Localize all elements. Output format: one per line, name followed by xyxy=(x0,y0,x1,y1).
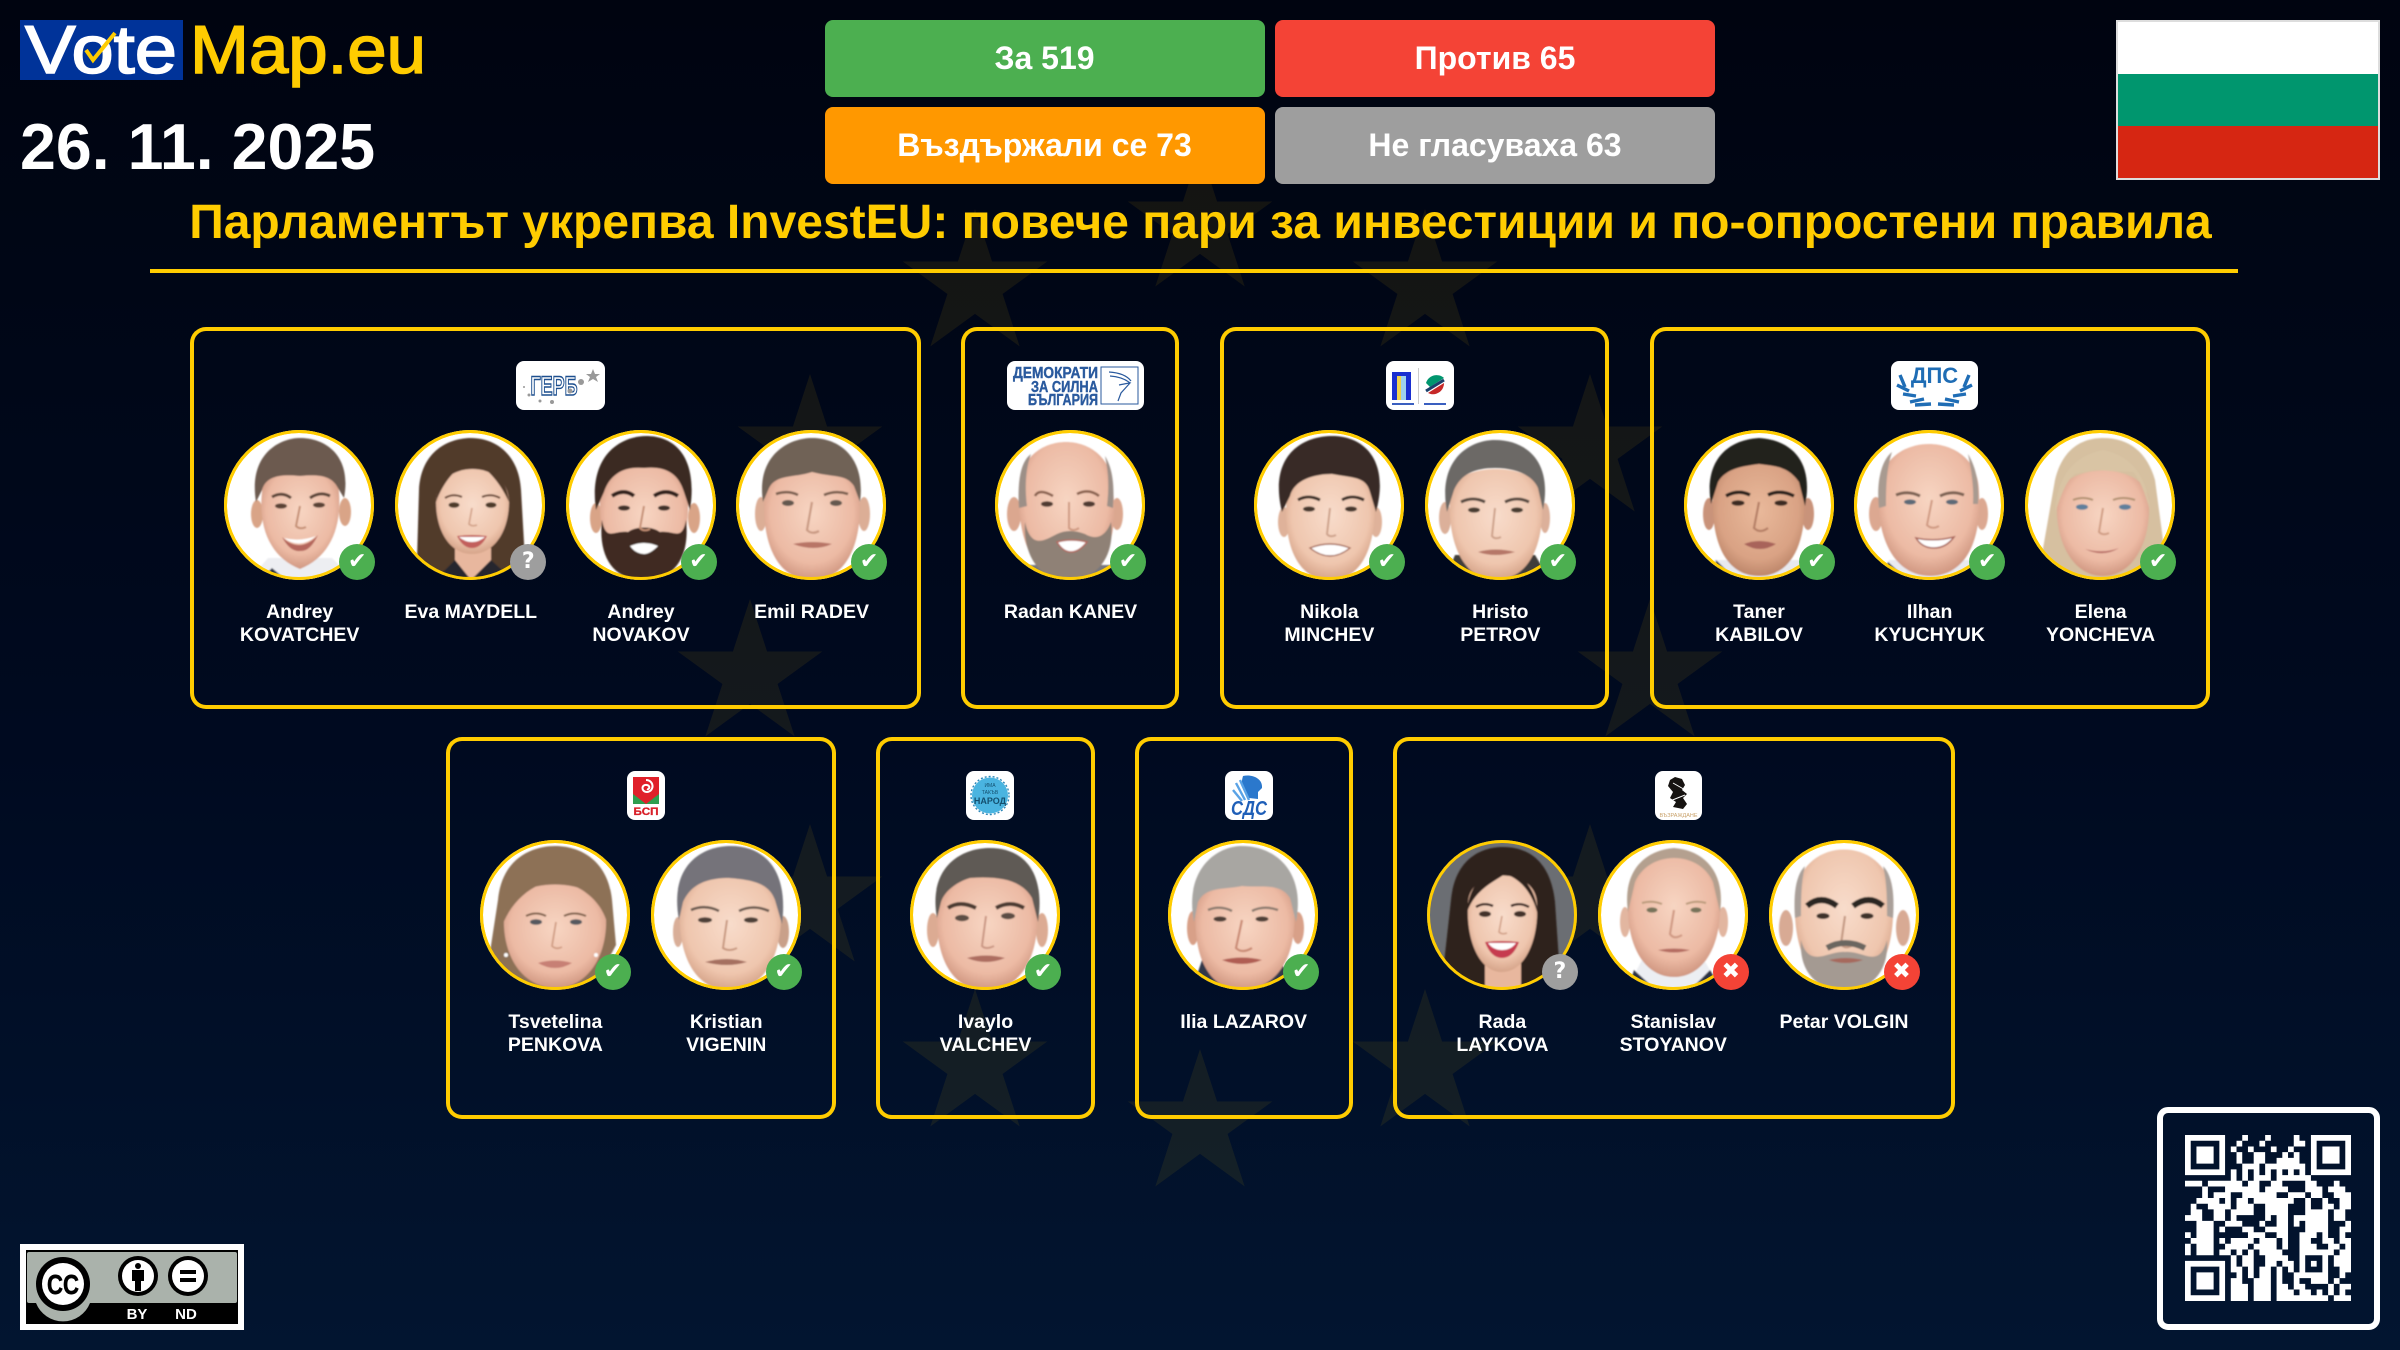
name: YONCHEVA xyxy=(2046,624,2155,646)
vote badge: no: ✖ xyxy=(1722,959,1740,984)
member: Elena Yoncheva xyxy=(2025,430,2176,646)
photo: Andrey Novakov xyxy=(566,430,716,580)
party logo: ITN: НАРОД xyxy=(974,796,1007,806)
panel: Demokrati za silna Bulgaria xyxy=(961,327,1179,709)
name: Eva MAYDELL xyxy=(404,601,537,623)
photo: Petar Volgin xyxy=(1768,840,1918,990)
party logo: DPS xyxy=(1891,361,1978,410)
name: Nikola xyxy=(1300,601,1359,623)
vote badge: yes xyxy=(2140,544,2176,580)
name: Andrey xyxy=(266,601,333,623)
name: LAYKOVA xyxy=(1456,1034,1548,1056)
name: Ivaylo xyxy=(958,1011,1013,1033)
panel: GERB xyxy=(190,327,921,709)
party logo: GERB xyxy=(516,361,605,410)
name: Emil RADEV xyxy=(754,601,869,623)
vote badge: yes xyxy=(1110,544,1146,580)
party logo: DSB xyxy=(1007,361,1144,410)
name xyxy=(1456,1011,1548,1056)
name xyxy=(1620,1011,1727,1056)
vote badge: not voted xyxy=(1542,954,1578,990)
name: Rada xyxy=(1479,1011,1526,1033)
name: Tsvetelina xyxy=(508,1011,602,1033)
vote summary: did not vote: Не гласуваха 63 xyxy=(1368,127,1622,163)
panel: BSP xyxy=(446,737,836,1119)
vote badge: yes: ✔ xyxy=(860,549,878,574)
licence badge: CC BY-ND: BY xyxy=(127,1306,147,1323)
party logo: ITN xyxy=(966,771,1014,820)
photo: Hristo Petrov xyxy=(1425,430,1575,580)
name xyxy=(592,601,690,646)
photo: Stanislav Stoyanov xyxy=(1598,840,1748,990)
party logo: ITN: ТАКЪВ xyxy=(982,790,999,796)
party logo: Vazrazhdane xyxy=(1655,771,1702,820)
photo: Rada Laykova xyxy=(1427,840,1577,990)
vote badge: yes: ✔ xyxy=(1378,549,1396,574)
member: Eva Maydell xyxy=(395,430,546,623)
vote badge: yes xyxy=(766,954,802,990)
vote badge: yes xyxy=(680,544,716,580)
vote summary: for xyxy=(824,20,1264,97)
party logo: SDS xyxy=(1225,771,1273,820)
vote badge: no xyxy=(1884,954,1920,990)
vote badge: yes: ✔ xyxy=(1034,959,1052,984)
name: KYUCHYUK xyxy=(1874,624,1985,646)
party logo: PP-DB xyxy=(1386,361,1454,410)
name: PETROV xyxy=(1460,624,1540,646)
name xyxy=(240,601,360,646)
vote badge: yes: ✔ xyxy=(1292,959,1310,984)
vote badge: yes xyxy=(1540,544,1576,580)
vote badge: yes xyxy=(339,544,375,580)
vote summary: abstained: Въздържали се 73 xyxy=(897,127,1192,163)
licence badge: CC BY-ND: CC xyxy=(47,1269,79,1300)
member: Andrey Kovatchev xyxy=(224,430,375,646)
QR code xyxy=(2156,1106,2380,1330)
photo: Emil Radev xyxy=(736,430,886,580)
vote badge: yes: ✔ xyxy=(604,959,622,984)
vote summary: did not vote xyxy=(1275,107,1715,184)
title: Парламентът укрепва InvestEU: повече пари за инвестиции и по-опростени правила xyxy=(189,196,2212,249)
member: Hristo Petrov xyxy=(1425,430,1576,646)
name xyxy=(940,1011,1032,1056)
member: Andrey Novakov xyxy=(566,430,717,646)
photo: Kristian Vigenin xyxy=(651,840,801,990)
name xyxy=(2046,601,2155,646)
name: Ilia LAZAROV xyxy=(1180,1011,1307,1033)
party logo: Vazrazhdane: ВЪЗРАЖДАНЕ xyxy=(1660,813,1698,819)
name xyxy=(1460,601,1540,646)
name: Taner xyxy=(1733,601,1785,623)
party logo: ITN: ИМА xyxy=(984,783,996,789)
name xyxy=(686,1011,766,1056)
photo: Ilhan Kyuchyuk xyxy=(1854,430,2004,580)
member: Ivaylo Valchev xyxy=(910,840,1061,1056)
member: Ilhan Kyuchyuk xyxy=(1854,430,2005,646)
name: PENKOVA xyxy=(508,1034,603,1056)
member: Petar Volgin xyxy=(1769,840,1920,1033)
photo: Elena Yoncheva xyxy=(2025,430,2175,580)
vote badge: yes xyxy=(1798,544,1834,580)
panel: DPS xyxy=(1650,327,2210,709)
panel: PP-DB xyxy=(1220,327,1609,709)
vote badge: yes: ✔ xyxy=(774,959,793,984)
vote summary: against: Против 65 xyxy=(1415,40,1575,76)
member: Rada Laykova xyxy=(1427,840,1578,1056)
name xyxy=(508,1011,603,1056)
name: KOVATCHEV xyxy=(240,624,359,646)
vote badge: yes: ✔ xyxy=(1549,549,1567,574)
vote summary: abstained xyxy=(824,107,1264,184)
name: Kristian xyxy=(690,1011,762,1033)
vote badge: yes xyxy=(1025,954,1061,990)
name xyxy=(1874,601,1985,646)
photo: Andrey Kovatchev xyxy=(224,430,374,580)
name: STOYANOV xyxy=(1620,1034,1727,1056)
member: Nikola Minchev xyxy=(1254,430,1405,646)
photo: Ivaylo Valchev xyxy=(910,840,1060,990)
vote badge: yes xyxy=(1969,544,2005,580)
photo: Radan Kanev xyxy=(995,430,1145,580)
vote badge: not voted: ? xyxy=(1554,959,1566,984)
name: Elena xyxy=(2075,601,2127,623)
name: VIGENIN xyxy=(686,1034,766,1056)
member: Emil Radev xyxy=(736,430,887,623)
vote badge: yes xyxy=(1369,544,1405,580)
vote badge: yes: ✔ xyxy=(1119,549,1137,574)
name: Andrey xyxy=(607,601,675,623)
name xyxy=(1284,601,1374,646)
panel: SDS xyxy=(1135,737,1353,1119)
party logo: BSP: БСП xyxy=(634,806,659,818)
member: Radan Kanev xyxy=(995,430,1146,623)
licence badge: CC BY-ND xyxy=(20,1244,244,1330)
vote badge: not voted xyxy=(510,544,546,580)
vote badge: yes: ✔ xyxy=(1978,549,1996,574)
vote badge: no xyxy=(1713,954,1749,990)
name: Radan KANEV xyxy=(1004,601,1137,623)
party logo: DSB: ЗА СИЛНА xyxy=(1031,379,1098,396)
member: Stanislav Stoyanov xyxy=(1598,840,1749,1056)
vote summary: against xyxy=(1275,20,1715,97)
vote badge: yes xyxy=(1283,954,1319,990)
name: NOVAKOV xyxy=(592,624,690,646)
photo: Taner Kabilov xyxy=(1684,430,1834,580)
member: Ilia Lazarov xyxy=(1168,840,1319,1033)
photo: Nikola Minchev xyxy=(1254,430,1404,580)
name: Ilhan xyxy=(1907,601,1952,623)
vote summary: for: За 519 xyxy=(994,40,1095,76)
vote badge: yes: ✔ xyxy=(1807,549,1826,574)
party logo: GERB: ГЕРБ xyxy=(530,371,578,401)
vote badge: yes: ✔ xyxy=(689,549,708,574)
vote badge: yes xyxy=(595,954,631,990)
name: Stanislav xyxy=(1630,1011,1716,1033)
member: Kristian Vigenin xyxy=(651,840,802,1056)
name xyxy=(1715,601,1803,646)
licence badge: CC BY-ND: ND xyxy=(175,1306,197,1323)
party logo: BSP xyxy=(627,771,665,820)
title underline xyxy=(150,269,2238,273)
name: Petar VOLGIN xyxy=(1780,1011,1908,1033)
vote badge: yes: ✔ xyxy=(348,549,366,574)
brand logo: VoteMap.eu xyxy=(20,20,426,88)
member: Tsvetelina Penkova xyxy=(480,840,631,1056)
vote badge: yes: ✔ xyxy=(2149,549,2167,574)
party logo: DPS: ДПС xyxy=(1911,363,1958,388)
vote badge: not voted: ? xyxy=(522,549,535,574)
photo: Ilia Lazarov xyxy=(1168,840,1318,990)
photo: Eva Maydell xyxy=(395,430,545,580)
name: VALCHEV xyxy=(940,1034,1031,1056)
vote badge: no: ✖ xyxy=(1892,959,1911,984)
name: MINCHEV xyxy=(1284,624,1374,646)
member: Taner Kabilov xyxy=(1684,430,1835,646)
name: Hristo xyxy=(1472,601,1528,623)
photo: Tsvetelina Penkova xyxy=(480,840,630,990)
vote badge: yes xyxy=(851,544,887,580)
panel: ITN xyxy=(876,737,1095,1119)
party logo: DSB: БЪЛГАРИЯ xyxy=(1028,392,1098,409)
panel: Vazrazhdane xyxy=(1393,737,1955,1119)
date: 26. 11. 2025 xyxy=(20,111,375,183)
party logo: DSB: ДЕМОКРАТИ xyxy=(1013,365,1098,382)
flag: Bulgaria xyxy=(2116,20,2380,180)
name: KABILOV xyxy=(1715,624,1803,646)
